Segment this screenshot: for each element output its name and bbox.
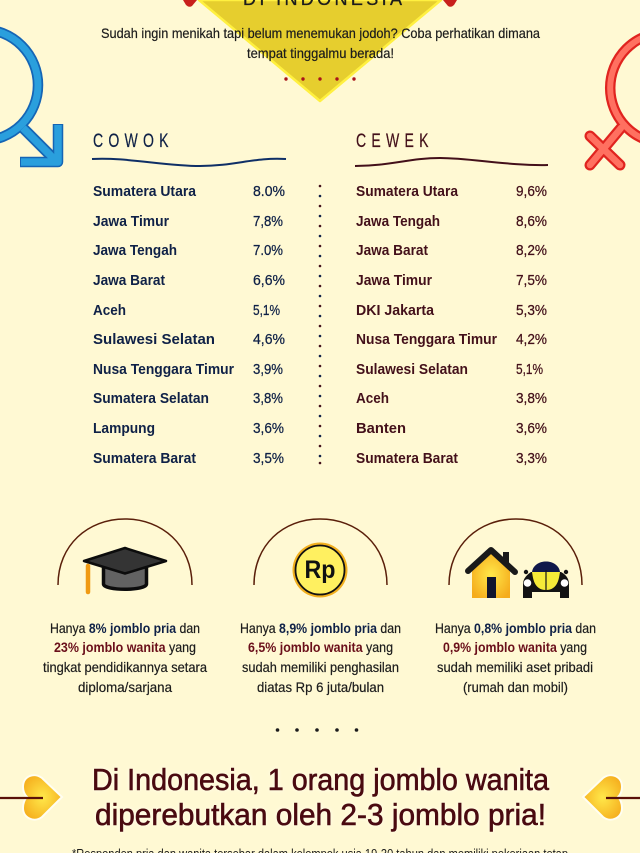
caption <box>240 620 401 695</box>
table: cewek: Jawa Barat <box>356 243 428 259</box>
heading: cewek <box>355 130 548 166</box>
dark dots <box>276 728 358 732</box>
table: cewek: Sulawesi Selatan <box>356 362 468 378</box>
icon: rupiah coin <box>292 542 348 598</box>
table: cowok: 5,1% <box>253 303 280 319</box>
caption: sudah memiliki penghasilan <box>242 659 399 675</box>
caption: (rumah dan mobil) <box>463 679 568 695</box>
triangle <box>199 0 441 101</box>
table: cowok: 3,5% <box>253 451 284 467</box>
caption: sudah memiliki aset pribadi <box>437 659 593 675</box>
icon: female symbol <box>590 32 640 165</box>
caption: diploma/sarjana <box>78 679 172 695</box>
table: cowok: Jawa Tengah <box>93 243 177 259</box>
icon: male symbol <box>0 29 58 162</box>
caption: 6,5% jomblo wanita yang <box>248 639 393 655</box>
table: cewek: 9,6% <box>516 184 547 200</box>
panel: income <box>240 519 401 695</box>
icon: rupiah coin: Rp <box>304 556 336 584</box>
arc <box>449 519 582 585</box>
table: cewek: 3,6% <box>516 421 547 437</box>
caption: Hanya 8,9% jomblo pria dan <box>240 620 401 636</box>
table: cowok: Aceh <box>93 303 126 319</box>
icon: red banner ends <box>183 0 457 7</box>
table: cewek <box>356 184 547 467</box>
table: cewek: 5,1% <box>516 362 543 378</box>
icon: graduation cap <box>84 548 166 592</box>
icon: left heart <box>0 775 62 820</box>
title banner: yellow triangle <box>183 0 457 101</box>
icon: car <box>523 562 569 598</box>
panel: education <box>43 519 207 695</box>
table: cowok: Nusa Tenggara Timur <box>93 362 234 378</box>
table: cewek: 7,5% <box>516 273 547 289</box>
heading: cowok <box>92 130 286 166</box>
table: cowok: Sumatera Utara <box>93 184 197 200</box>
table: cowok: 6,6% <box>253 273 285 289</box>
headline: Di Indonesia, 1 orang jomblo wanita <box>92 762 550 797</box>
headline <box>92 762 550 832</box>
arc <box>254 519 387 585</box>
table: cowok: Sumatera Selatan <box>93 391 209 407</box>
table: cewek: Aceh <box>356 391 389 407</box>
arc <box>58 519 192 585</box>
caption <box>43 620 207 695</box>
table: cewek: Jawa Tengah <box>356 214 440 230</box>
table: cewek: Nusa Tenggara Timur <box>356 332 497 348</box>
caption: 0,9% jomblo wanita yang <box>443 639 587 655</box>
caption <box>435 620 596 695</box>
table: cewek: 8,6% <box>516 214 547 230</box>
caption: 23% jomblo wanita yang <box>54 639 196 655</box>
intro text <box>101 25 540 61</box>
table: cewek: Jawa Timur <box>356 273 432 289</box>
icon: right heart <box>583 775 640 820</box>
table: cowok: Jawa Barat <box>93 273 165 289</box>
heading: cowok: COWOK <box>93 130 168 152</box>
red dots <box>284 77 356 81</box>
intro text: Sudah ingin menikah tapi belum menemukan jodoh? Coba perhatikan dimana <box>101 25 540 41</box>
table: cowok: 8.0% <box>253 184 285 200</box>
table: cowok: Jawa Timur <box>93 214 169 230</box>
caption: diatas Rp 6 juta/bulan <box>257 679 384 695</box>
table: cowok: 7.0% <box>253 243 283 259</box>
table: cewek: 3,8% <box>516 391 547 407</box>
dotted divider <box>319 185 321 464</box>
table: cowok: 4,6% <box>253 332 285 348</box>
table: cewek: DKI Jakarta <box>356 303 435 319</box>
table: cewek: 5,3% <box>516 303 547 319</box>
icon: house <box>468 550 515 598</box>
table: cewek: 4,2% <box>516 332 547 348</box>
intro text: tempat tinggalmu berada! <box>247 45 394 61</box>
headline: diperebutkan oleh 2-3 jomblo pria! <box>95 797 546 832</box>
table: cewek: 3,3% <box>516 451 547 467</box>
table: cowok: 3,8% <box>253 391 283 407</box>
table: cowok: 3,6% <box>253 421 284 437</box>
table: cowok: 7,8% <box>253 214 283 230</box>
table: cewek: Banten <box>356 421 406 437</box>
caption: Hanya 0,8% jomblo pria dan <box>435 620 596 636</box>
table: cowok: Lampung <box>93 421 155 437</box>
table: cowok: Sumatera Barat <box>93 451 196 467</box>
table: cowok: Sulawesi Selatan <box>93 332 215 348</box>
table: cewek: Sumatera Utara <box>356 184 459 200</box>
table: cowok <box>93 184 285 467</box>
table: cowok: 3,9% <box>253 362 283 378</box>
heading: cewek: CEWEK <box>356 130 429 152</box>
table: cewek: 8,2% <box>516 243 547 259</box>
caption: Hanya 8% jomblo pria dan <box>50 620 200 636</box>
table: cewek: Sumatera Barat <box>356 451 458 467</box>
panel: assets <box>435 519 596 695</box>
caption: tingkat pendidikannya setara <box>43 659 207 675</box>
